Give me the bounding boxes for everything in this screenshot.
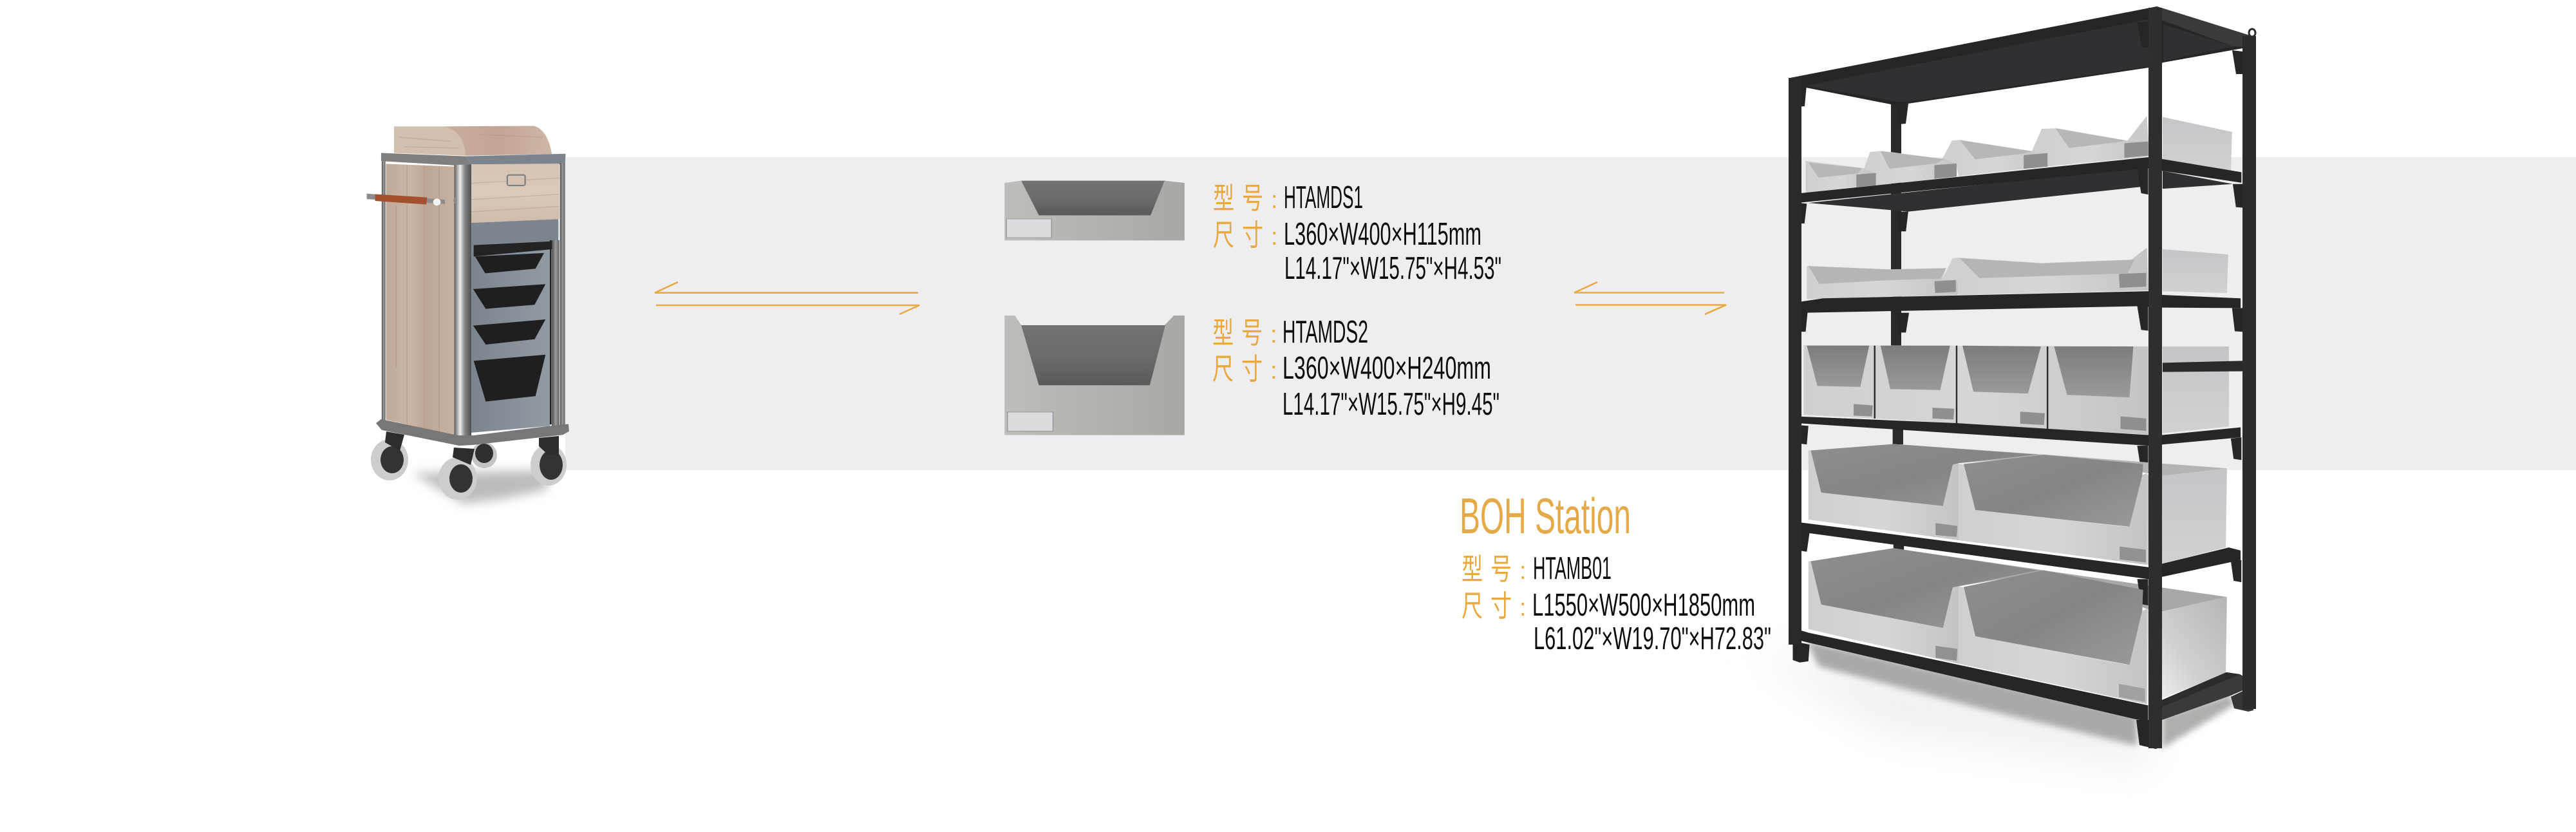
shelf right post (2242, 36, 2256, 709)
size label: 尺寸 (1462, 591, 1519, 623)
bin opening (1021, 325, 1165, 385)
row 4 bin right side (2147, 468, 2227, 565)
imperial size: L14.17"×W15.75"×H4.53" (1284, 251, 1501, 286)
bin label (1006, 219, 1051, 238)
heading: BOH Station: BOH Station (1460, 487, 1631, 544)
metric size: L360×W400×H240mm (1283, 351, 1491, 386)
black tray header (474, 241, 556, 256)
deck underside (1806, 19, 2148, 102)
row 1 bin D (2032, 128, 2148, 168)
right posts (550, 163, 565, 427)
row 3 bin openings (1807, 346, 2133, 397)
caster middle (438, 448, 477, 500)
shelf lower bins and frame (1793, 417, 2241, 721)
shelf near post (2148, 8, 2162, 748)
right leg (2231, 686, 2253, 712)
arrows: trolley to bins (655, 282, 919, 314)
model number: HTAMB01 (1533, 551, 1612, 586)
row 4 shelf (1797, 522, 2241, 579)
corner post (454, 164, 471, 439)
bin HTAMDS2 image (1004, 316, 1185, 435)
size colon: : (1519, 594, 1527, 621)
model colon: : (1271, 187, 1278, 214)
row 3 brackets (1798, 425, 2241, 472)
trolley body (367, 126, 569, 446)
base plate (376, 419, 569, 446)
side door with wood grain (386, 164, 454, 435)
model label: 型号 (1462, 554, 1519, 586)
shelf left post (1789, 78, 1801, 645)
steel panel (471, 219, 558, 249)
row 3 bin dividers (1875, 346, 2047, 429)
background band (565, 157, 2576, 470)
model colon: : (1270, 321, 1277, 348)
wooden back splash (394, 126, 552, 156)
trolley floor shadow (412, 470, 547, 504)
bin HTAMDS1 specs (1213, 180, 1501, 286)
drawer (471, 164, 559, 223)
caster right (531, 436, 567, 486)
size colon: : (1271, 223, 1278, 251)
row 3 bins front (1803, 345, 2148, 435)
model colon: : (1519, 558, 1527, 585)
imperial size: L61.02"×W19.70"×H72.83" (1534, 621, 1771, 656)
top brackets (1794, 21, 2242, 124)
row 5 bin right side (2147, 597, 2227, 704)
product: service trolley (367, 126, 569, 504)
row 3 shelf (1797, 417, 2241, 446)
left leg (1793, 641, 1810, 663)
row 4 bin A (1809, 444, 2038, 540)
row 1 bin E (2125, 116, 2149, 158)
row 1 shelf (1793, 157, 2241, 212)
beam inner lip (2162, 672, 2240, 707)
shelf top deck (1790, 6, 2256, 106)
row 1 bin B (1864, 151, 1957, 185)
arrows: bins to shelf (1574, 282, 1726, 314)
drawer handle (507, 175, 525, 185)
BOH Station specs (1462, 551, 1771, 656)
row 1 brackets (1795, 168, 2242, 231)
tray 1 (475, 253, 544, 273)
metric size: L360×W400×H115mm (1284, 217, 1481, 252)
row 5 bin B (1959, 571, 2147, 704)
bin HTAMDS2 specs (1212, 315, 1500, 422)
size colon: : (1270, 357, 1277, 384)
hanging loop (2249, 29, 2255, 37)
row 2 bin A (1807, 266, 1958, 299)
tray 2 (473, 284, 545, 309)
row 5 bin A (1809, 548, 2038, 664)
row 3 bin labels (1854, 404, 2146, 431)
bin opening (1021, 181, 1165, 215)
row 4 bin B (1959, 455, 2147, 565)
row 3 bin right side (2163, 346, 2229, 433)
model number: HTAMDS2 (1283, 315, 1368, 350)
row 4 brackets (1798, 531, 2241, 605)
left thin post (382, 161, 386, 420)
size label: 尺寸 (1212, 354, 1270, 386)
metric size: L1550×W500×H1850mm (1532, 588, 1755, 623)
right cross bar (2163, 361, 2250, 372)
shelf back post (1891, 103, 1901, 351)
row 4 bin top rim (1894, 444, 2227, 476)
row 1 bin A (1806, 161, 1876, 193)
imperial size: L14.17"×W15.75"×H9.45" (1283, 387, 1500, 422)
model number: HTAMDS1 (1284, 180, 1363, 215)
tray 3 (473, 319, 545, 345)
row 2 bin B (1942, 248, 2148, 295)
bottom shelf front beam (1797, 629, 2148, 721)
model label: 型号 (1213, 183, 1271, 215)
tray stack body (471, 241, 550, 433)
shelf back post lower segments (1893, 423, 1904, 552)
bin label (1008, 412, 1053, 431)
product: BOH shelf unit, floor shadow (1751, 641, 2234, 766)
row 1 bin C (1942, 140, 2049, 176)
top rim (381, 153, 566, 165)
deck underside right (2163, 24, 2233, 61)
row 2 shelf (1793, 291, 2241, 313)
caster left (371, 431, 408, 480)
size label: 尺寸 (1213, 220, 1271, 252)
row 1 bin right side (2163, 117, 2232, 171)
model label: 型号 (1212, 317, 1270, 350)
near leg (2136, 720, 2162, 749)
tray 4 (474, 355, 545, 402)
row 2 brackets (1796, 307, 2242, 332)
bin HTAMDS1 image (1004, 181, 1185, 240)
shelf upper part (1793, 116, 2250, 435)
row 2 bin right side (2163, 249, 2228, 293)
side push handle (367, 194, 456, 205)
back caster (471, 442, 497, 468)
deck right beam (2157, 6, 2256, 48)
bottom shelf right beam (2162, 672, 2249, 720)
row 5 bin top rim (1894, 548, 2227, 611)
